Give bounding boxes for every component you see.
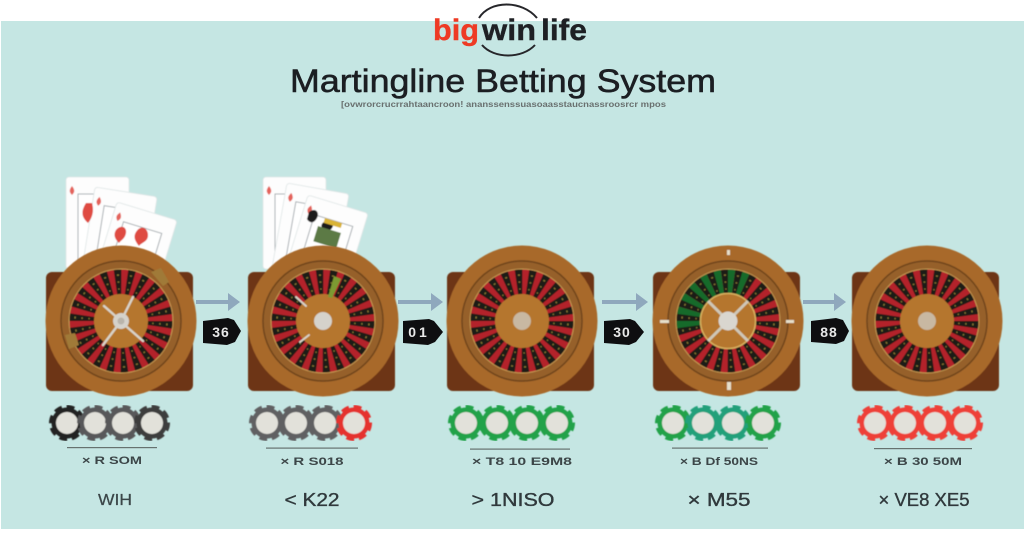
tag: 01: 01 — [408, 324, 430, 340]
result: step 2: < K22 — [284, 490, 340, 510]
title: Martingline Betting System — [290, 63, 716, 99]
step 1: cards — [66, 177, 177, 308]
chips: step 1 — [51, 407, 168, 439]
result: step 1: WIH — [98, 492, 132, 509]
caption: step 1: × R SOM — [82, 455, 142, 467]
chips: step 3 — [450, 407, 573, 439]
chips: step 5 — [859, 407, 981, 439]
arrow 3 — [602, 293, 648, 311]
logo: bigwinlife — [433, 4, 587, 56]
caption: step 4: × B Df 50NS — [680, 456, 758, 468]
tag: 36 — [203, 318, 241, 345]
caption: step 2: × R S018 — [280, 456, 344, 468]
tag: 01 — [403, 319, 443, 345]
chips: step 4 — [657, 407, 779, 439]
logo: bigwinlife: life — [541, 14, 587, 47]
result: step 5: × VE8 XE5 — [878, 490, 970, 510]
step 5: roulette wheel — [852, 246, 1002, 396]
result: step 3: > 1NISO — [472, 490, 554, 510]
tag: 30: 30 — [613, 324, 631, 340]
step 4: roulette wheel — [652, 246, 804, 396]
caption: step 2 — [266, 448, 358, 468]
step 2: cards — [263, 177, 368, 301]
caption: step 3 — [470, 448, 572, 468]
tag: 36: 36 — [212, 324, 230, 340]
tag: 30 — [604, 319, 644, 345]
step 3: roulette wheel — [446, 246, 598, 396]
caption: step 4 — [672, 448, 768, 468]
logo: bigwinlife: win — [481, 14, 536, 47]
result: step 4: × M55 — [688, 490, 750, 510]
step 1: roulette wheel — [46, 246, 196, 396]
arrow 1 — [196, 293, 240, 311]
tag: 88: 88 — [820, 324, 838, 340]
arrow 2 — [398, 293, 443, 311]
caption: step 3: × T8 10 E9M8 — [472, 456, 572, 468]
caption: step 1 — [67, 447, 157, 467]
chips: step 2 — [251, 407, 370, 439]
subtitle: [ovwrorcrucrrahtaancroon! ananssenssuasoaasstaucnassroosrcr mpos — [341, 100, 667, 109]
step 2: roulette wheel — [248, 246, 398, 396]
caption: step 5: × B 30 50M — [884, 456, 962, 468]
logo: bigwinlife: big — [433, 14, 479, 47]
caption: step 5 — [874, 448, 972, 468]
tag: 88 — [811, 318, 849, 344]
arrow 4 — [803, 293, 846, 311]
